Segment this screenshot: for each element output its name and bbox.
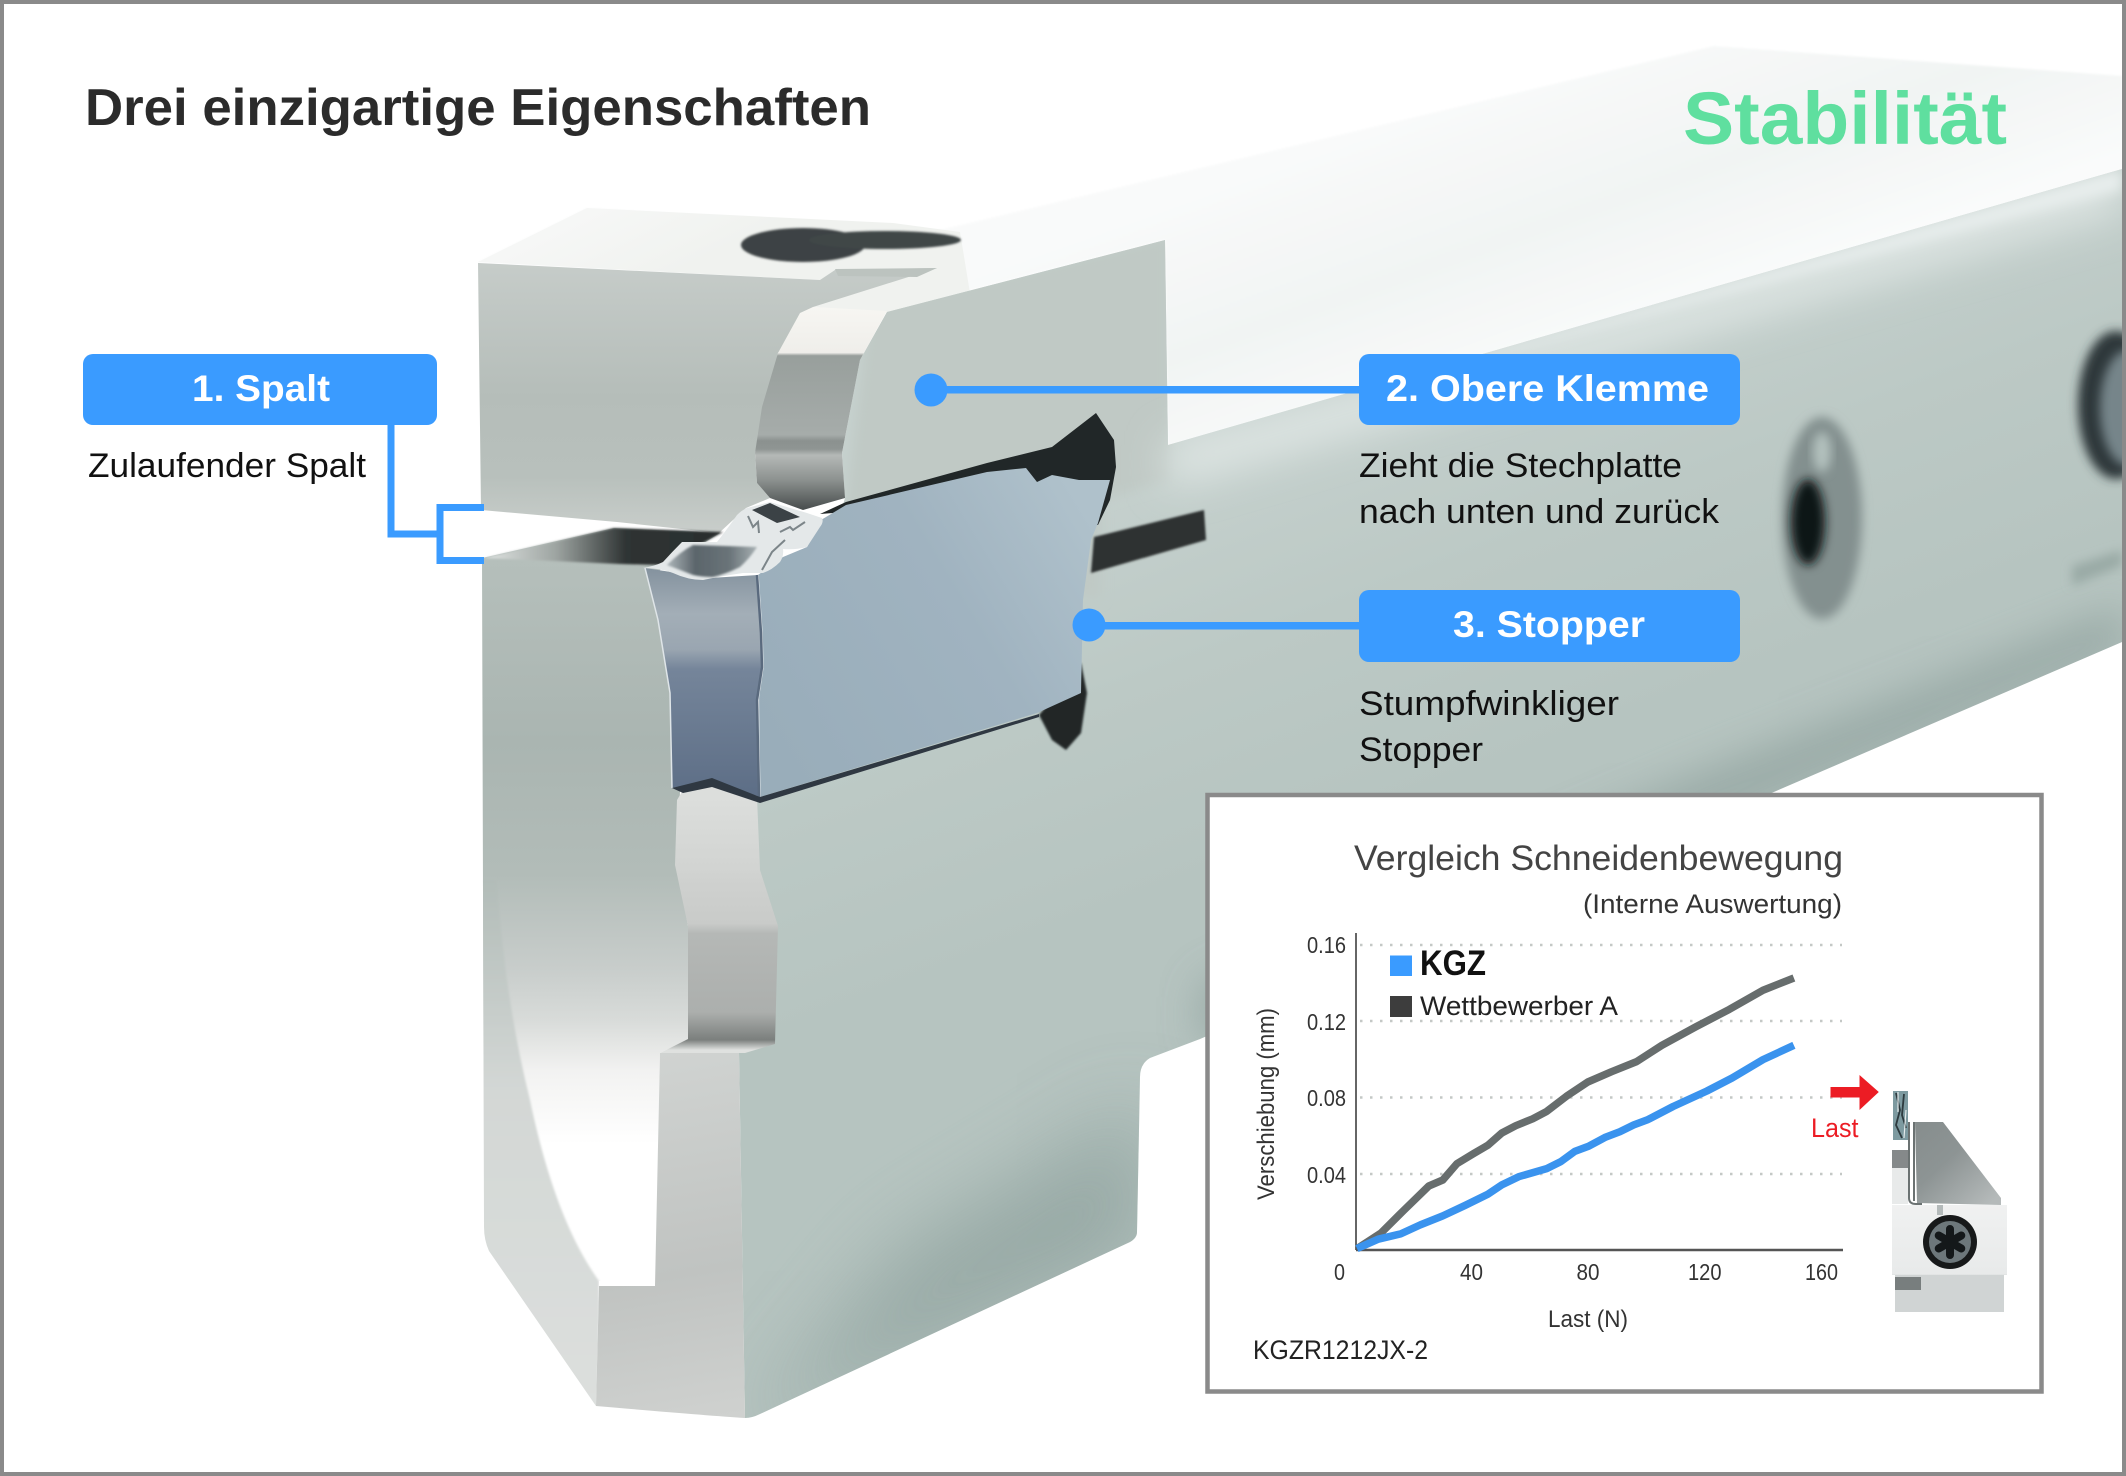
clamp chamfer (755, 307, 887, 510)
bar top surface (478, 46, 2122, 446)
marker dot (1072, 608, 1106, 642)
chip breaker dark pocket (667, 545, 757, 577)
badge label: 3. Stopper (1453, 604, 1645, 645)
y tick labels: 0.16 (1307, 932, 1346, 958)
badge (1359, 590, 1740, 662)
legend swatch KGZ (1390, 956, 1412, 976)
icon: tool holder thumbnail (1892, 1091, 2007, 1312)
panel: comparison chart (1208, 795, 2042, 1392)
legend swatch competitor (1390, 996, 1412, 1017)
insert left side face (645, 568, 763, 797)
dark slot right (1091, 510, 1206, 573)
badge label: 1. Spalt (192, 368, 330, 409)
callout 3: Stopper (1072, 590, 1740, 769)
bar side marking (2072, 550, 2122, 586)
load label: Last (1811, 1113, 1859, 1143)
chip breaker highlights (748, 516, 805, 570)
head top surface (478, 208, 970, 312)
lower recessed side surface (482, 528, 720, 1406)
insert front face (758, 468, 1110, 797)
panel frame (1208, 795, 2042, 1392)
x axis (1356, 1249, 1843, 1251)
main front face and bar side (739, 169, 2126, 1440)
leader and bracket (391, 425, 484, 560)
insert seat support (660, 785, 778, 1053)
chip breaker dark top (752, 503, 800, 523)
x tick labels (1334, 1259, 1838, 1285)
lower notch (1039, 663, 1087, 750)
small strip behind hole (835, 268, 937, 277)
legend label competitor: Wettbewerber A (1420, 991, 1618, 1021)
callout 1: Spalt (83, 354, 484, 560)
description: Stopper (1359, 731, 1483, 769)
title: Drei einzigartige Eigenschaften (85, 79, 871, 137)
front chamfer column (596, 1053, 745, 1418)
legend (1390, 944, 1618, 1021)
screw hole on head top (741, 228, 961, 262)
y tick labels: 0.12 (1307, 1009, 1346, 1035)
description: nach unten und zurück (1359, 493, 1720, 531)
badge (83, 354, 437, 425)
insert (643, 468, 1110, 803)
dark slot left (484, 528, 723, 565)
insert bottom edge (672, 714, 1039, 803)
y tick labels (1307, 932, 1346, 1188)
heading: Stabilität: Stabilität (1683, 77, 2007, 160)
x axis title: Last (N) (1548, 1306, 1628, 1333)
top notch (820, 413, 1116, 525)
marker dot (914, 374, 948, 406)
description: Zulaufender Spalt (88, 447, 367, 485)
bar mounting hole 1 (1782, 417, 1862, 619)
description (1359, 447, 1720, 531)
badge (1359, 354, 1740, 425)
photo: grooving tool holder with insert (470, 46, 2126, 1440)
y axis title: Verschiebung (mm) (1253, 1008, 1280, 1200)
x tick labels: 80 (1576, 1259, 1600, 1285)
left rim (483, 908, 600, 1406)
chip breaker (643, 502, 823, 580)
soft top edge of bar (1557, 170, 2122, 336)
insert side edges (645, 568, 763, 797)
x tick labels: 120 (1688, 1259, 1722, 1285)
upper block front face (478, 263, 937, 533)
leader line (1089, 622, 1361, 630)
x tick labels: 0 (1334, 1259, 1345, 1285)
y axis (1355, 933, 1357, 1250)
model label: KGZR1212JX-2 (1253, 1335, 1428, 1365)
bar mounting hole 2 (2078, 331, 2126, 479)
x tick labels: 160 (1805, 1259, 1838, 1285)
competitor curve (1357, 978, 1794, 1249)
description: Stumpfwinkliger (1359, 685, 1619, 723)
description: Zieht die Stechplatte (1359, 447, 1682, 485)
legend label KGZ: KGZ (1420, 944, 1486, 983)
KGZ curve (1357, 1045, 1794, 1249)
description (1359, 685, 1619, 769)
chart title: Vergleich Schneidenbewegung (1354, 839, 1843, 878)
y tick labels: 0.08 (1307, 1085, 1346, 1111)
badge label: 2. Obere Klemme (1386, 368, 1709, 409)
x tick labels: 40 (1460, 1259, 1483, 1285)
chart subtitle: (Interne Auswertung) (1583, 889, 1842, 919)
arrow: load direction (1830, 1075, 1879, 1110)
y tick labels: 0.04 (1307, 1162, 1346, 1188)
leader line (931, 386, 1361, 394)
callout 2: Obere Klemme (914, 354, 1740, 531)
